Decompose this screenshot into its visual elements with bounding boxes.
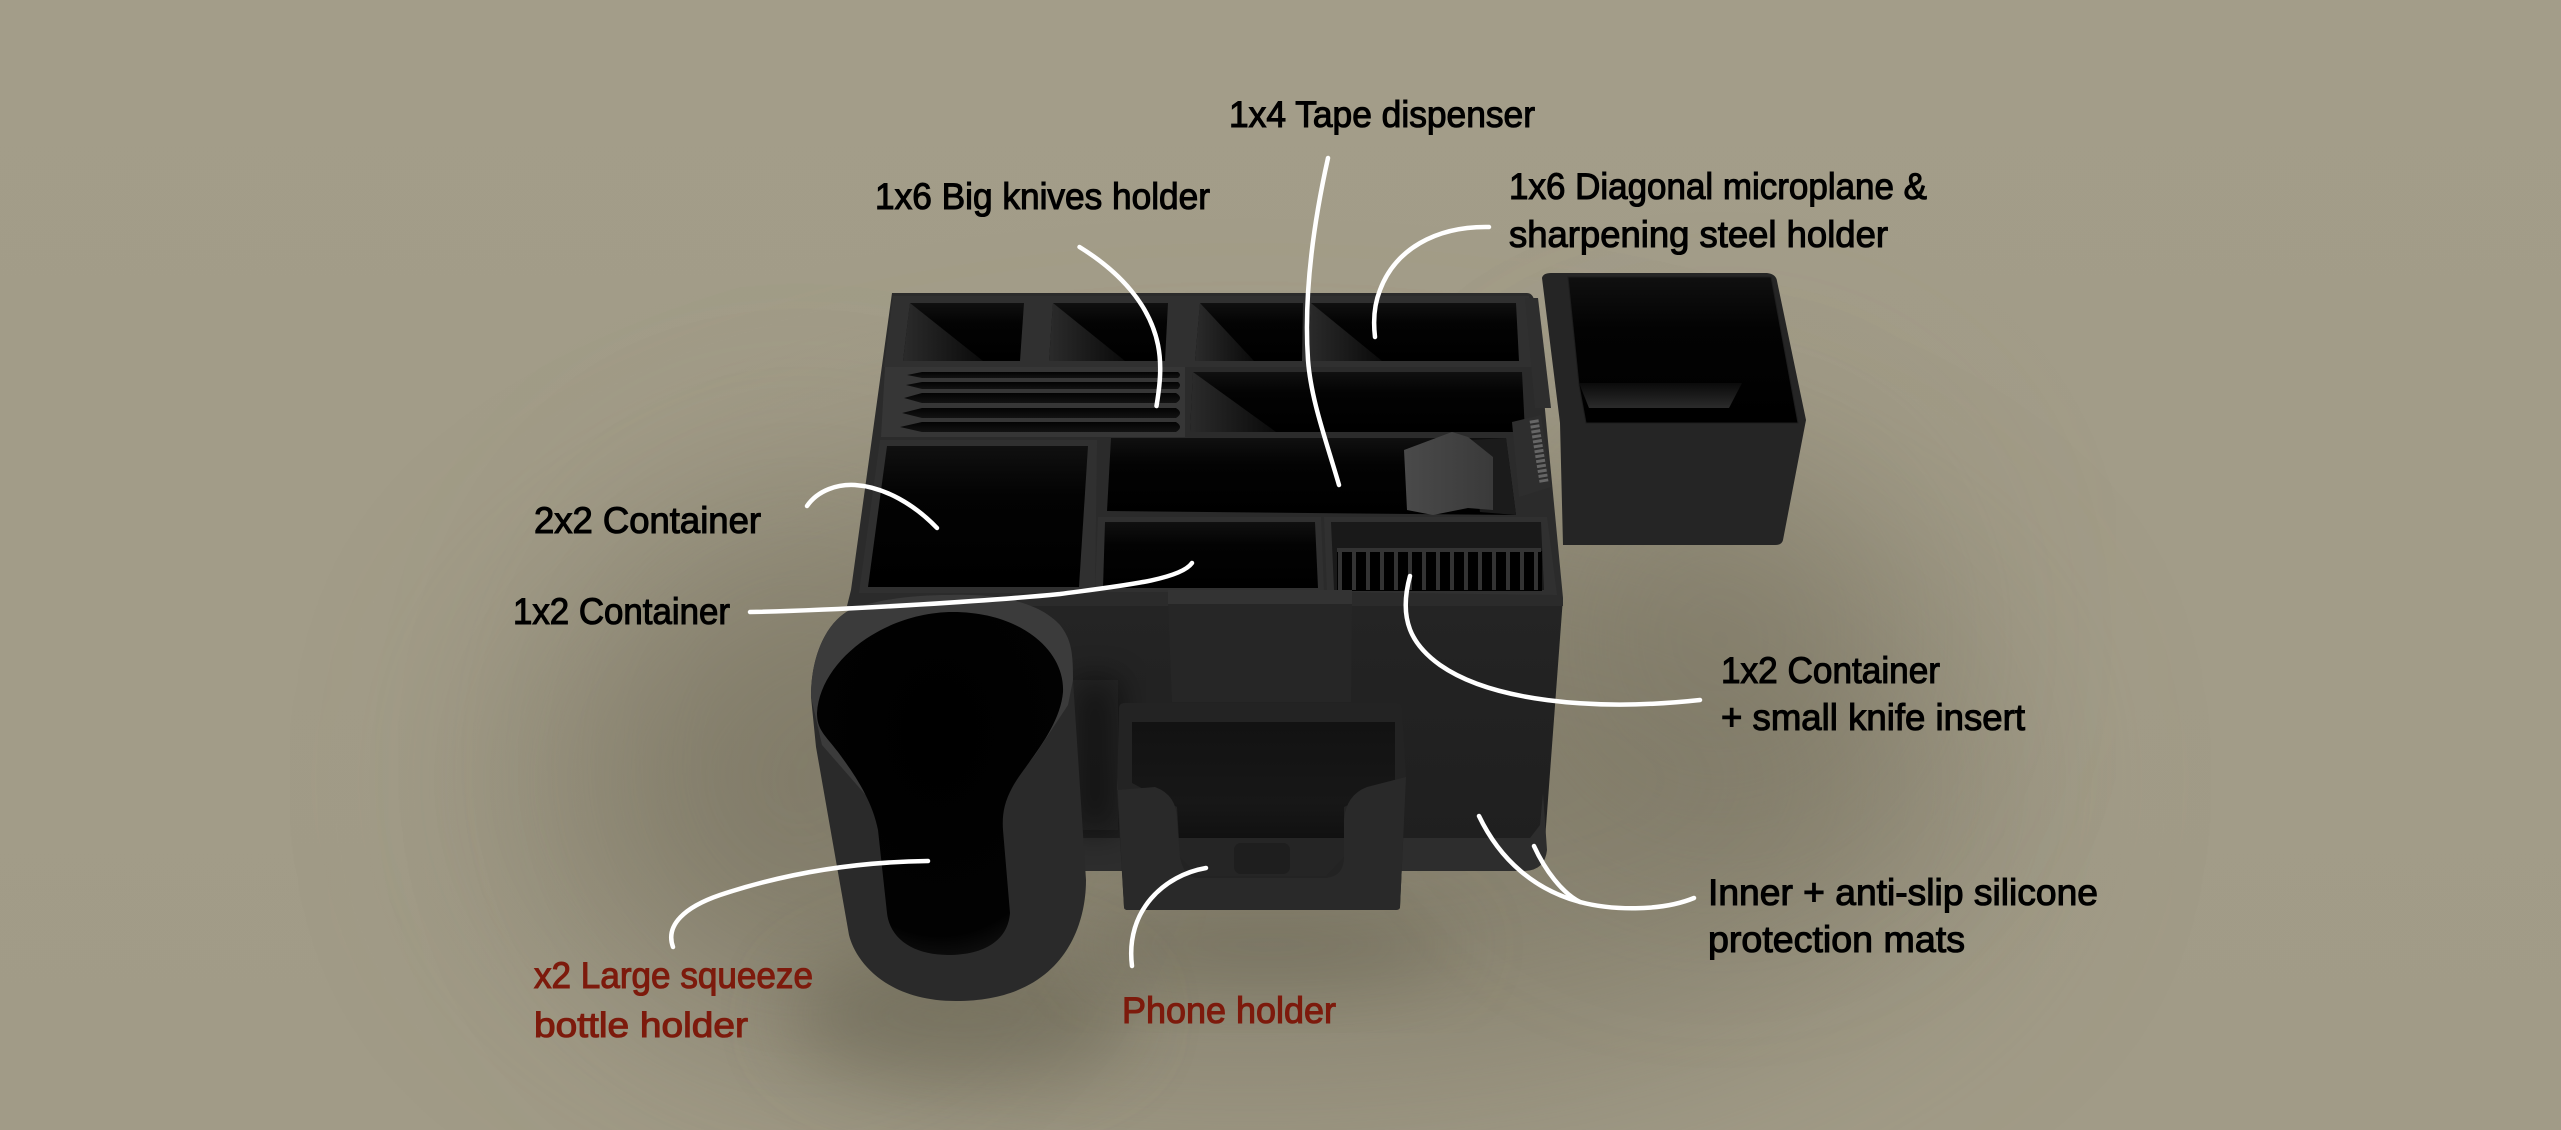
side container opening [1568,277,1798,423]
arrow: inner mat [1479,816,1694,908]
row 1 compartments [884,296,1534,367]
label: 1x2 container with knife insert [1721,650,2026,738]
serrated blade [1512,415,1551,497]
label: squeeze bottle holder: x2 Large squeeze [534,955,813,996]
label: 1x6 diagonal holder: sharpening steel holder [1509,214,1888,255]
side container [1542,273,1806,545]
label: squeeze bottle holder [534,955,813,1045]
label: silicone mats: protection mats [1708,919,1965,960]
bottle holder top rim [811,595,1073,800]
knife grid [1337,550,1542,591]
label: silicone mats [1708,872,2098,960]
label: 1x2 container with knife insert: + small knife insert [1721,697,2026,738]
organiser base unit [847,293,1563,871]
row 2: big knife slots [881,367,1185,437]
squeeze bottle holder [811,595,1086,1001]
soft shadows on backdrop [530,440,1970,1085]
tape recess [1470,438,1516,515]
arrow: knife insert [1406,576,1700,705]
label: phone holder: Phone holder [1122,990,1336,1031]
front face [1000,598,1563,840]
arrow: bottle holder [671,861,928,947]
label: 1x4 tape dispenser: 1x4 Tape dispenser [1229,94,1535,135]
label: squeeze bottle holder: bottle holder [534,1006,748,1045]
label: silicone mats: Inner + anti-slip silicone [1708,872,2098,913]
hinge strip [1525,298,1551,408]
label: 1x6 diagonal holder [1509,166,1927,255]
arrow: tape dispenser [1307,158,1339,485]
label: 1x6 diagonal holder: 1x6 Diagonal microplane & [1509,166,1927,207]
arrow: 2x2 container [807,485,937,528]
label: 2x2 container: 2x2 Container [534,500,761,541]
dark recess beside bottle holder [1072,680,1118,830]
phone holder [1117,703,1406,910]
label: 1x2 container: 1x2 Container [513,591,730,632]
row 2: diagonal holder [1190,372,1525,432]
top rim [847,293,1563,606]
sloped shelf [1579,383,1742,408]
label: 1x2 container with knife insert: 1x2 Container [1721,650,1940,691]
2x2 container [859,440,1097,593]
arrow: anti-slip mat [1534,846,1580,902]
phone holder front cradle [1117,777,1406,910]
1x2 container [1095,517,1324,592]
1x2 container with small knife insert [1324,517,1557,595]
arrow: diagonal holder [1374,227,1489,337]
base tray [1072,793,1547,871]
arrow: 1x2 container [750,563,1192,612]
bottle holder keyhole opening [817,612,1063,955]
phone holder strap [1168,590,1352,702]
label: 1x6 big knives holder: 1x6 Big knives holder [875,176,1210,217]
tape cutter block [1404,432,1493,515]
arrow: big knives [1080,247,1160,406]
cable notch [1234,843,1290,874]
tape dispenser well [1107,415,1551,515]
arrow: phone holder [1131,868,1206,966]
